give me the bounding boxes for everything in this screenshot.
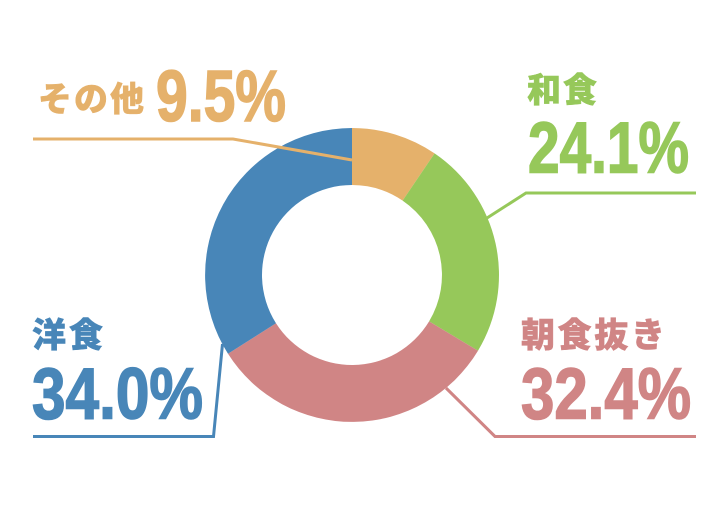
value: 9.5% (156, 57, 286, 137)
leader line: その他 (33, 139, 352, 160)
segment: 洋食 34.0% (205, 128, 352, 354)
donut chart (205, 128, 499, 422)
callout: 和食 (527, 72, 689, 188)
leader line: 和食 (487, 193, 696, 218)
segment: 朝食抜き 32.4% (228, 321, 478, 422)
label: 朝食抜き (521, 317, 665, 355)
leader line: 洋食 (33, 344, 222, 436)
label: 洋食 (32, 317, 103, 355)
segment: 和食 24.1% (403, 153, 499, 351)
value: 34.0% (32, 354, 203, 434)
callout: その他 (38, 57, 286, 137)
label: その他 (38, 81, 144, 119)
callout: 洋食 (32, 317, 203, 434)
callout: 朝食抜き (521, 317, 691, 434)
label: 和食 (527, 72, 597, 110)
segment: その他 9.5% (352, 128, 435, 201)
leader line: 朝食抜き (446, 388, 696, 436)
